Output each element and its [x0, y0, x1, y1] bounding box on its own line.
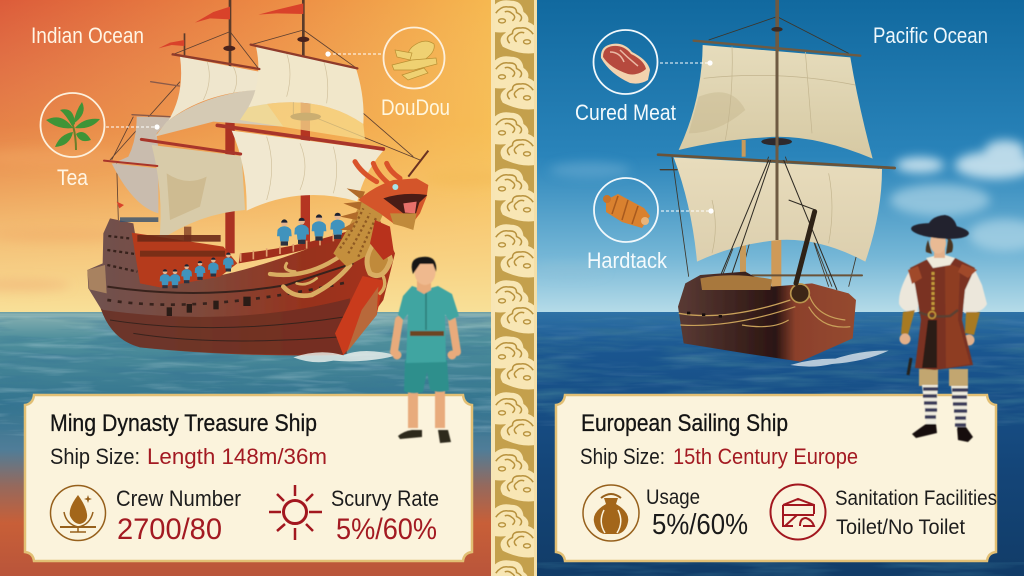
stat: scurvy rate: [331, 486, 439, 546]
stat: sanitation facilities: Sanitation Facilities: [835, 487, 997, 510]
icon: droplet: [50, 486, 106, 540]
sea: [537, 312, 1024, 576]
main sails: [152, 47, 383, 241]
sky: sunset: [0, 0, 505, 312]
yards: [658, 41, 895, 275]
card: Ming Dynasty Treasure Ship: [25, 395, 472, 561]
stat: scurvy rate: Scurvy Rate: [331, 486, 439, 511]
icon: meat: [601, 44, 650, 84]
bow wave: [790, 351, 889, 367]
callout: doudou: [325, 28, 450, 120]
icon: root: [392, 41, 437, 80]
masts: [740, 0, 792, 292]
rigging: [110, 30, 420, 220]
ship size: Ship Size:: [580, 444, 665, 469]
icon: hardtack: [603, 194, 650, 228]
stat: usage: Usage: [646, 486, 700, 509]
sails: [674, 45, 882, 262]
figure: European sailor: [899, 215, 987, 442]
ship size: Ship Size:: [50, 444, 140, 469]
card: European Sailing Ship: [556, 395, 997, 561]
label: Indian Ocean: Indian Ocean: [31, 23, 144, 48]
heading: European Sailing Ship: [581, 410, 788, 437]
icon: sanitation: [770, 484, 826, 540]
hull: [87, 213, 395, 355]
callout: hardtack: [587, 178, 714, 273]
ship size value: Length 148m/36m: [147, 444, 327, 469]
back sails: [112, 117, 172, 213]
spars: [104, 45, 383, 166]
masts: [184, 0, 321, 267]
hull: [678, 272, 856, 362]
label: Pacific Ocean: Pacific Ocean: [873, 23, 988, 48]
callout: tea: [40, 93, 160, 190]
callout: doudou: DouDou: [381, 95, 450, 120]
icon: jar: [583, 485, 639, 541]
stat: usage: 5%/60%: [652, 509, 748, 541]
icon: tea leaves: [46, 102, 100, 150]
bowsprit: [796, 212, 815, 283]
ship size value: 15th Century Europe: [673, 444, 858, 469]
bow wave: [293, 351, 397, 362]
stat: crew number: [116, 486, 241, 546]
dragon head: [333, 151, 428, 267]
crew on deck: [120, 213, 345, 288]
stat: usage: [646, 486, 748, 541]
gold ornament: [270, 238, 391, 296]
rigging: [672, 17, 879, 287]
rope lines: [719, 160, 837, 290]
stat: crew number: 2700/80: [117, 513, 222, 546]
heading: Ming Dynasty Treasure Ship: [50, 410, 317, 437]
callout: tea: Tea: [57, 165, 89, 190]
european ship: [658, 0, 895, 367]
stat: sanitation facilities: [835, 487, 997, 539]
treasure ship: [87, 0, 428, 362]
stat: scurvy rate: 5%/60%: [336, 513, 437, 546]
callout: hardtack: Hardtack: [587, 248, 668, 273]
callout: cured meat: [575, 30, 713, 125]
stat: sanitation facilities: Toilet/No Toilet: [836, 516, 965, 539]
figure: Ming sailor: [392, 257, 459, 443]
panel: Pacific Ocean scene: [534, 0, 1024, 576]
decorative centre band: gold cloud pattern: [490, 0, 539, 576]
stat: crew number: Crew Number: [116, 486, 241, 511]
flags: [117, 3, 303, 208]
icon: sun: [269, 485, 322, 540]
sea: [0, 312, 491, 576]
sky: blue: [534, 0, 1024, 312]
callout: cured meat: Cured Meat: [575, 100, 676, 125]
panel: Indian Ocean scene: [0, 0, 505, 576]
